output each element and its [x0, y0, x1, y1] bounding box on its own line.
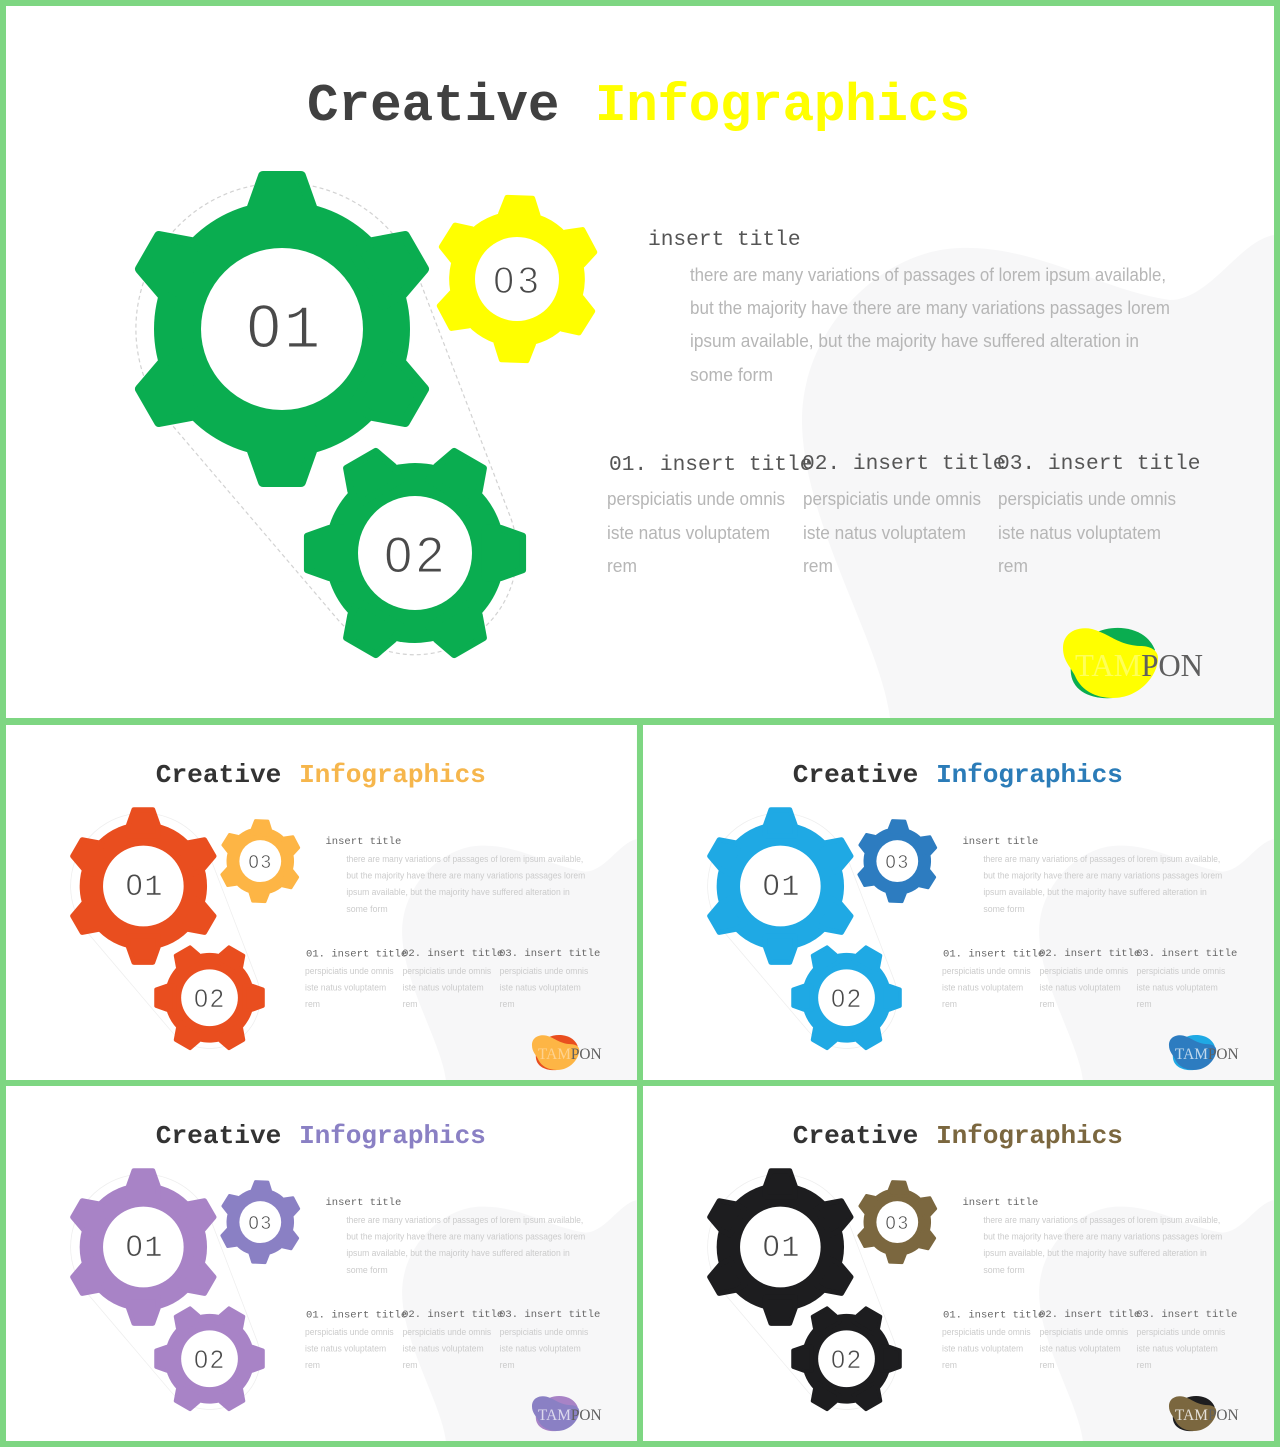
gear 03: [856, 819, 938, 903]
text block: insert title: [962, 1197, 1222, 1275]
gear 02: 02: [194, 985, 226, 1013]
gear 01: 0: [126, 869, 143, 902]
text block: insert title: but the majority have there are many variations passages lorem: [983, 871, 1222, 881]
text columns: iste natus voluptatem: [1040, 983, 1121, 993]
gear 01: [70, 1171, 217, 1323]
text columns: perspiciatis unde omnis: [1040, 1327, 1129, 1337]
text column 01: rem: [607, 556, 637, 576]
gear 03: 03: [493, 260, 543, 301]
text columns: iste natus voluptatem: [305, 983, 386, 993]
text columns: rem: [1040, 999, 1055, 1009]
text block: insert title: ipsum available, but the majority have suffered alteration in: [983, 887, 1207, 897]
text block: insert title: some form: [346, 1265, 388, 1275]
text columns: 03. insert title: [499, 1309, 600, 1321]
text columns: perspiciatis unde omnis: [1040, 966, 1129, 976]
text columns: rem: [403, 1360, 418, 1370]
text column 03: rem: [998, 556, 1028, 576]
text columns: perspiciatis unde omnis: [403, 1327, 492, 1337]
title: Creative: [307, 76, 560, 136]
text block: insert title: but the majority have there are many variations passages lorem: [346, 871, 585, 881]
gear 02: 02: [194, 1346, 226, 1374]
text block: insert title: [648, 228, 1170, 385]
text columns: perspiciatis unde omnis: [1137, 966, 1226, 976]
gear 01: 0: [763, 869, 780, 902]
text block: insert title: ipsum available, but the majority have suffered alteration in: [346, 887, 570, 897]
panel: purple slide: [6, 1086, 637, 1441]
text block: insert title: there are many variations of passages of lorem ipsum available,: [346, 1215, 583, 1225]
title: Creative: [156, 760, 281, 790]
gear 01: 1: [284, 298, 320, 366]
title: Infographics: [299, 1121, 486, 1151]
title: Infographics: [936, 1121, 1123, 1151]
text columns: perspiciatis unde omnis: [305, 1327, 394, 1337]
text block: insert title: insert title: [325, 836, 401, 848]
text block: insert title: there are many variations of passages of lorem ipsum available,: [983, 1215, 1220, 1225]
gear 01: 1: [781, 870, 799, 904]
gear 02: [270, 407, 560, 699]
text columns: perspiciatis unde omnis: [942, 966, 1031, 976]
gear 01: 1: [144, 1231, 162, 1265]
text column 02: [802, 452, 1005, 576]
title: Creative: [793, 760, 918, 790]
gear 01: 1: [144, 870, 162, 904]
gear 03: [219, 1180, 301, 1264]
logo: [1169, 1035, 1239, 1070]
text block: insert title: some form: [983, 1265, 1025, 1275]
text columns: iste natus voluptatem: [942, 1344, 1023, 1354]
gear 03: 03: [886, 851, 910, 872]
gear 03: 03: [249, 1212, 273, 1233]
text columns: iste natus voluptatem: [1137, 1344, 1218, 1354]
logo: TAMPON: [1175, 1046, 1239, 1063]
text columns: 02. insert title: [402, 948, 503, 960]
text columns: rem: [942, 999, 957, 1009]
logo: TAMPON: [1075, 647, 1203, 683]
text block: insert title: there are many variations of passages of lorem ipsum available,: [983, 854, 1220, 864]
text block: insert title: ipsum available, but the majority have suffered alteration in: [346, 1248, 570, 1258]
text columns: 01. insert title: [943, 1309, 1044, 1321]
text block: insert title: but the majority have there are many variations passages lorem: [690, 298, 1170, 318]
text block: insert title: insert title: [962, 836, 1038, 848]
text columns: rem: [1137, 999, 1152, 1009]
text block: insert title: there are many variations of passages of lorem ipsum available,: [690, 265, 1166, 285]
text columns: 02. insert title: [1039, 948, 1140, 960]
text block: insert title: insert title: [962, 1197, 1038, 1209]
text column 02: rem: [803, 556, 833, 576]
gear 02: [774, 925, 919, 1070]
gear 02: [137, 1286, 282, 1431]
text columns: 02. insert title: [1039, 1309, 1140, 1321]
gear 01: 1: [781, 1231, 799, 1265]
text columns: 02. insert title: [402, 1309, 503, 1321]
text column 03: 03. insert title: [997, 452, 1200, 476]
text column 01: [607, 453, 812, 576]
text block: insert title: but the majority have there are many variations passages lorem: [346, 1232, 585, 1242]
text columns: perspiciatis unde omnis: [500, 1327, 589, 1337]
text block: insert title: some form: [346, 904, 388, 914]
text columns: perspiciatis unde omnis: [500, 966, 589, 976]
title: Infographics: [299, 760, 486, 790]
text columns: [942, 1309, 1237, 1370]
gear 01: 0: [247, 293, 280, 360]
text column 01: iste natus voluptatem: [607, 523, 770, 543]
text columns: 01. insert title: [943, 948, 1044, 960]
gear 01: [70, 810, 217, 962]
logo: TAMPON: [538, 1046, 602, 1063]
text columns: [942, 948, 1237, 1009]
text block: insert title: some form: [983, 904, 1025, 914]
text columns: rem: [1137, 1360, 1152, 1370]
text columns: rem: [500, 999, 515, 1009]
title: Creative: [156, 1121, 281, 1151]
gear 03: [435, 195, 599, 363]
text block: insert title: insert title: [648, 228, 801, 252]
text columns: [305, 948, 600, 1009]
gear outline: [708, 1174, 897, 1409]
text columns: 01. insert title: [306, 948, 407, 960]
text columns: iste natus voluptatem: [403, 983, 484, 993]
text column 01: 01. insert title: [609, 453, 812, 477]
text columns: iste natus voluptatem: [1040, 1344, 1121, 1354]
gear outline: [71, 813, 260, 1048]
title: Infographics: [936, 760, 1123, 790]
gear 02: 02: [384, 527, 448, 583]
title: Creative: [793, 1121, 918, 1151]
logo: [532, 1035, 602, 1070]
text columns: [305, 1309, 600, 1370]
text block: insert title: ipsum available, but the majority have suffered alteration in: [983, 1248, 1207, 1258]
text columns: rem: [403, 999, 418, 1009]
text columns: rem: [942, 1360, 957, 1370]
title: Infographics: [595, 76, 970, 136]
gear outline: [708, 813, 897, 1048]
text columns: perspiciatis unde omnis: [1137, 1327, 1226, 1337]
gear 01: 0: [763, 1230, 780, 1263]
text columns: rem: [305, 1360, 320, 1370]
text block: insert title: but the majority have there are many variations passages lorem: [983, 1232, 1222, 1242]
text column 02: 02. insert title: [802, 452, 1005, 476]
panel: black slide: [643, 1086, 1274, 1441]
text columns: 03. insert title: [499, 948, 600, 960]
text columns: iste natus voluptatem: [500, 983, 581, 993]
text columns: 01. insert title: [306, 1309, 407, 1321]
gear 02: [137, 925, 282, 1070]
gear 01: [707, 1171, 854, 1323]
text columns: iste natus voluptatem: [305, 1344, 386, 1354]
text column 02: perspiciatis unde omnis: [803, 489, 981, 509]
text block: insert title: [325, 836, 585, 914]
logo: [1063, 628, 1203, 698]
text block: insert title: some form: [690, 365, 773, 385]
text columns: rem: [1040, 1360, 1055, 1370]
logo: TAMPON: [1175, 1407, 1239, 1424]
text columns: iste natus voluptatem: [403, 1344, 484, 1354]
gear 01: [707, 810, 854, 962]
gear 03: 03: [249, 851, 273, 872]
dashed gear outline: [136, 183, 517, 655]
gear outline: [71, 1174, 260, 1409]
text columns: rem: [500, 1360, 515, 1370]
gear 01: 0: [126, 1230, 143, 1263]
text column 01: perspiciatis unde omnis: [607, 489, 785, 509]
gear 02: 02: [831, 985, 863, 1013]
text columns: perspiciatis unde omnis: [305, 966, 394, 976]
text columns: perspiciatis unde omnis: [942, 1327, 1031, 1337]
text column 03: perspiciatis unde omnis: [998, 489, 1176, 509]
text column 02: iste natus voluptatem: [803, 523, 966, 543]
gear 03: 03: [886, 1212, 910, 1233]
gear 01: [134, 176, 430, 482]
gear 02: [774, 1286, 919, 1431]
logo: TAMPON: [538, 1407, 602, 1424]
panel: main green slide: [6, 6, 1274, 718]
text block: insert title: there are many variations of passages of lorem ipsum available,: [346, 854, 583, 864]
logo: [1169, 1396, 1239, 1431]
panel: blue slide: [643, 725, 1274, 1080]
text column 03: [997, 452, 1200, 576]
text columns: rem: [305, 999, 320, 1009]
panel: orange slide: [6, 725, 637, 1080]
text columns: 03. insert title: [1136, 1309, 1237, 1321]
text column 03: iste natus voluptatem: [998, 523, 1161, 543]
text columns: perspiciatis unde omnis: [403, 966, 492, 976]
text columns: iste natus voluptatem: [500, 1344, 581, 1354]
text columns: iste natus voluptatem: [942, 983, 1023, 993]
logo: [532, 1396, 602, 1431]
text columns: iste natus voluptatem: [1137, 983, 1218, 993]
text block: insert title: insert title: [325, 1197, 401, 1209]
gear 02: 02: [831, 1346, 863, 1374]
text block: insert title: [962, 836, 1222, 914]
text columns: 03. insert title: [1136, 948, 1237, 960]
text block: insert title: [325, 1197, 585, 1275]
text block: insert title: ipsum available, but the majority have suffered alteration in: [690, 331, 1139, 351]
gear 03: [219, 819, 301, 903]
gear 03: [856, 1180, 938, 1264]
